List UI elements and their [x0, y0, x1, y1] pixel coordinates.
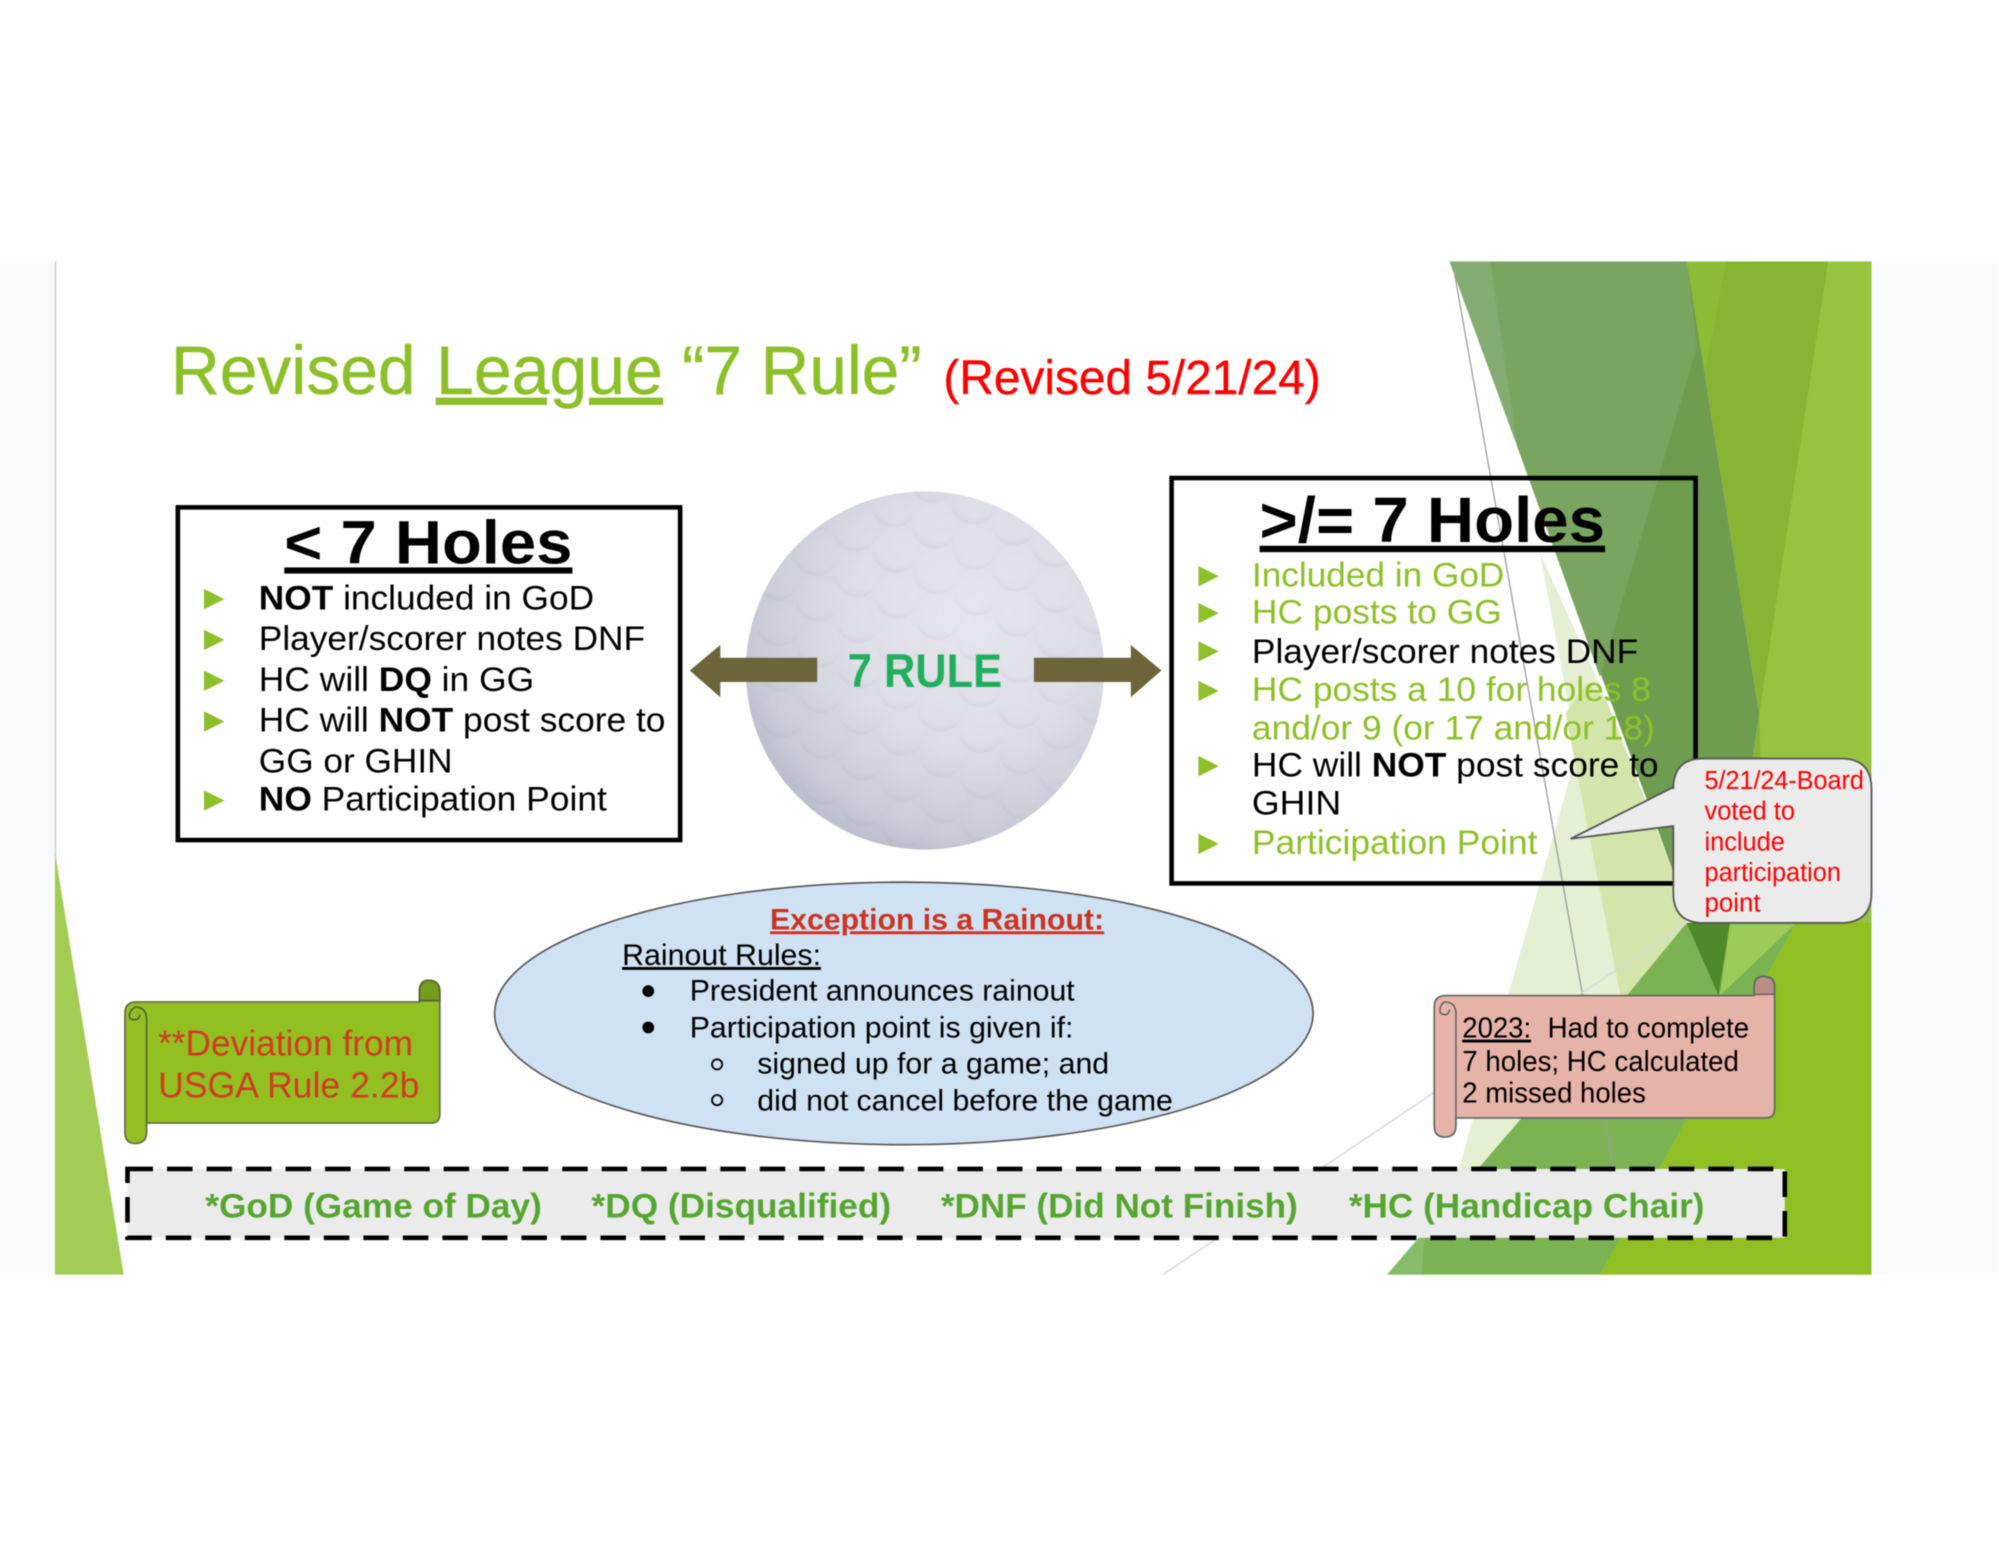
- scroll: 2023 rule: 2 missed holes: [1462, 1078, 1646, 1110]
- list: less than 7 holes rules: GG or GHIN: [259, 743, 453, 780]
- text: rainout rules: [622, 939, 1173, 1117]
- decorative green triangles: [55, 261, 1872, 1275]
- text: rainout rules: Rainout Rules:: [622, 939, 821, 972]
- callout: board vote: include: [1705, 826, 1785, 856]
- callout: board vote: participation: [1705, 857, 1841, 887]
- legend: abbreviations: *GoD (Game of Day): [205, 1187, 542, 1225]
- list: 7 or more holes rules: HC posts a 10 for holes 8: [1252, 671, 1651, 709]
- title: [171, 332, 922, 409]
- list: 7 or more holes rules: Included in GoD: [1252, 556, 1504, 594]
- scroll: 2023 rule: Had to complete: [1548, 1013, 1749, 1045]
- text: rainout rules: signed up for a game; and: [757, 1047, 1109, 1080]
- list: 7 or more holes rules: [1252, 556, 1659, 862]
- list: 7 or more holes rules: GHIN: [1252, 785, 1341, 823]
- scroll: 2023 rule: 7 holes; HC calculated: [1462, 1046, 1739, 1078]
- list: less than 7 holes rules: NO Participation Point: [259, 781, 607, 819]
- bullet markers: [1198, 566, 1219, 854]
- scroll: 2023 rule: [1434, 976, 1775, 1137]
- text: rainout rules: President announces rainout: [690, 975, 1075, 1008]
- scroll: USGA deviation: **Deviation from: [158, 1023, 413, 1063]
- legend: abbreviations: *DQ (Disqualified): [592, 1187, 891, 1225]
- scroll: USGA deviation: [125, 980, 440, 1143]
- label: 7 rule: 7 RULE: [848, 644, 1002, 697]
- callout: board vote: [1571, 758, 1872, 923]
- panel: 7 or more holes: [1172, 478, 1696, 883]
- callout: board vote: 5/21/24-Board: [1705, 765, 1864, 795]
- list: less than 7 holes rules: Player/scorer notes DNF: [259, 620, 645, 658]
- list: less than 7 holes rules: HC will DQ in GG: [259, 661, 534, 699]
- arrow: left: [690, 645, 817, 697]
- legend: abbreviations: *DNF (Did Not Finish): [941, 1187, 1298, 1225]
- list: 7 or more holes rules: Participation Point: [1252, 824, 1538, 862]
- text: rainout rules: Participation point is given if:: [690, 1012, 1073, 1045]
- list: 7 or more holes rules: Player/scorer notes DNF: [1252, 633, 1638, 671]
- callout: board vote: point: [1705, 887, 1761, 917]
- panel: less than 7 holes: [178, 507, 680, 840]
- list: 7 or more holes rules: HC will NOT post score to: [1252, 746, 1659, 784]
- text: rainout rules: did not cancel before the game: [757, 1084, 1173, 1117]
- list: 7 or more holes rules: and/or 9 (or 17 and/or 18): [1252, 709, 1655, 747]
- heading: exception: Exception is a Rainout:: [770, 903, 1104, 936]
- title: League: [436, 332, 663, 409]
- bullet markers: [204, 589, 224, 811]
- list: less than 7 holes rules: [259, 579, 665, 819]
- revision date: (Revised 5/21/24): [943, 351, 1321, 405]
- scroll: USGA deviation: USGA Rule 2.2b: [158, 1066, 419, 1106]
- slide background: [0, 261, 1999, 1275]
- arrow: right: [1034, 645, 1161, 697]
- heading: less than 7 holes: < 7 Holes: [284, 508, 572, 576]
- heading: 7 or more holes: >/= 7 Holes: [1260, 484, 1605, 556]
- golf ball with label: [746, 491, 1104, 850]
- title: Revised: [171, 332, 416, 409]
- legend: abbreviations: *HC (Handicap Chair): [1349, 1187, 1705, 1225]
- scroll: 2023 rule: 2023:: [1462, 1013, 1531, 1045]
- list: less than 7 holes rules: NOT included in GoD: [259, 579, 594, 617]
- legend: abbreviations: [127, 1169, 1785, 1238]
- list: 7 or more holes rules: HC posts to GG: [1252, 593, 1502, 631]
- ellipse: rainout exception: [495, 882, 1313, 1145]
- list: less than 7 holes rules: HC will NOT post score to: [259, 702, 665, 740]
- title: “7 Rule”: [682, 332, 922, 409]
- callout: board vote: voted to: [1705, 796, 1795, 826]
